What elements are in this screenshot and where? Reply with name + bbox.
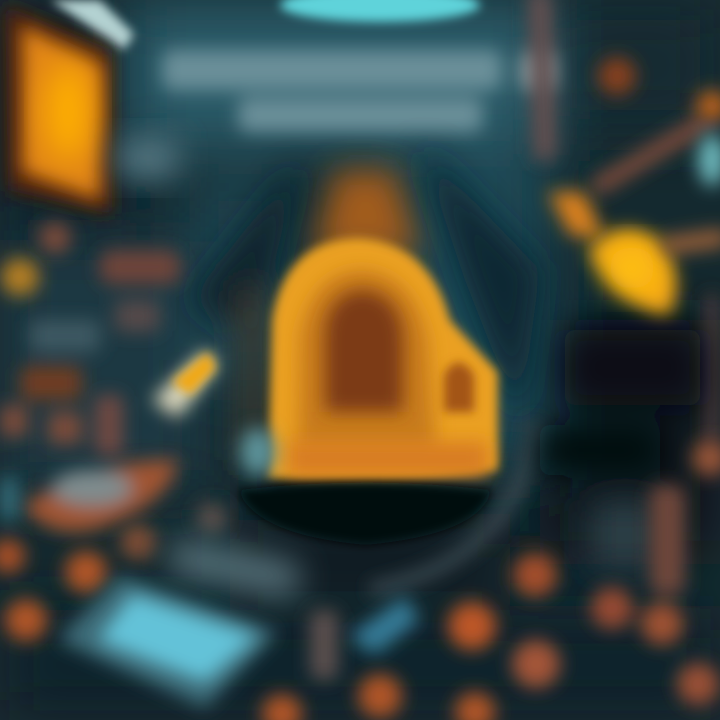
house arch spire glow — [312, 170, 420, 255]
yellow shape right — [548, 192, 676, 318]
grey block under orange panel — [118, 138, 178, 178]
left orange brown network — [0, 222, 180, 455]
bottom-right orange dots — [262, 440, 720, 720]
grey bar bottom centre — [168, 537, 302, 599]
top right orange dots and cyan glow — [598, 57, 720, 186]
small yellow dot left — [1, 258, 39, 296]
cyan tablet bottom left — [58, 576, 278, 708]
title text block (blurred) — [162, 50, 556, 132]
black base below house — [238, 482, 492, 545]
orange grey capsule — [22, 460, 178, 532]
diagonal brown strokes top right — [540, 0, 720, 440]
central golden house — [268, 238, 498, 481]
dark cone around house — [190, 145, 540, 460]
small cyan tablet bottom centre — [348, 596, 420, 655]
dark panels right — [540, 330, 700, 570]
pale glow left of base — [240, 428, 276, 476]
top-left white highlight — [50, 0, 134, 50]
bottom-left orange dots — [0, 478, 228, 641]
ring stroke around house — [370, 420, 535, 590]
yellow white chip — [152, 350, 218, 418]
top cyan glow — [280, 0, 480, 22]
orange panel top-left — [5, 5, 112, 215]
